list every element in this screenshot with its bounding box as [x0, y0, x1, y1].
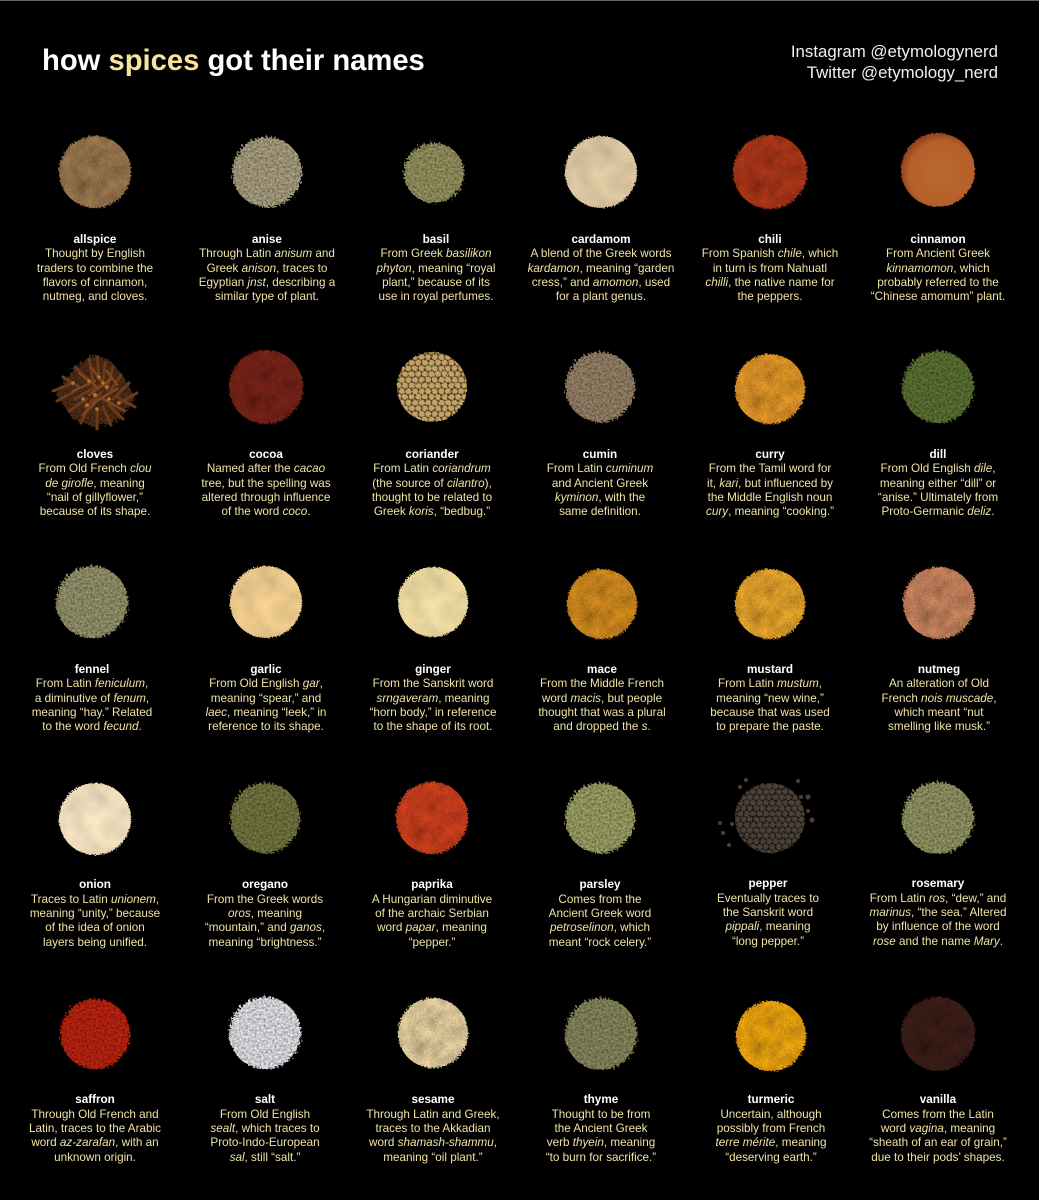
- card: nutmeg: nutmeg: [918, 663, 960, 676]
- card: allspice: allspice: [74, 233, 116, 246]
- card: cumin: same definition.: [559, 505, 641, 518]
- card: mustard: mustard: [747, 663, 793, 676]
- card: cloves: [38, 354, 152, 518]
- card: mustard: to prepare the paste.: [716, 720, 824, 733]
- card: cloves: “nail of gillyflower,”: [47, 491, 143, 504]
- card: paprika: A Hungarian diminutive: [372, 893, 492, 906]
- card: thyme: “to burn for sacrifice.”: [546, 1151, 656, 1164]
- card: cinnamon: kinnamomon, which: [886, 262, 990, 275]
- card: paprika: “pepper.”: [409, 936, 455, 949]
- card: cardamom: A blend of the Greek words: [530, 247, 671, 260]
- card: cloves: cloves: [77, 448, 113, 461]
- card: curry: [706, 353, 834, 518]
- card: basil: From Greek basilikon: [380, 247, 492, 260]
- card: pepper: “long pepper.”: [732, 935, 804, 948]
- card: turmeric: [715, 1000, 827, 1164]
- card: dill: From Old English dile,: [880, 462, 995, 475]
- card: oregano: [205, 780, 325, 949]
- card: cocoa: cocoa: [249, 448, 283, 461]
- card: cumin: [547, 350, 653, 518]
- card: garlic: reference to its shape.: [208, 720, 324, 733]
- card: cloves: de girofle, meaning: [45, 477, 145, 490]
- card: cardamom: cress,” and amomon, used: [532, 276, 670, 289]
- card: dill: dill: [930, 448, 946, 461]
- card: cardamom: kardamon, meaning “garden: [528, 262, 674, 275]
- card: saffron: [29, 997, 161, 1164]
- card: ginger: to the shape of its root.: [374, 720, 492, 733]
- card: garlic: [206, 565, 326, 733]
- card: nutmeg: smelling like musk.”: [888, 720, 990, 733]
- card: onion: layers being unified.: [43, 936, 147, 949]
- card: allspice: [37, 135, 153, 303]
- card: rosemary: rose and the name Mary.: [873, 935, 1003, 948]
- card: thyme: Thought to be from: [552, 1108, 650, 1121]
- card: rosemary: rosemary: [912, 877, 964, 890]
- card: coriander: From Latin coriandrum: [373, 462, 491, 475]
- card: anise: Egyptian jnst, describing a: [199, 276, 335, 289]
- card: vanilla: word vagina, meaning: [881, 1122, 995, 1135]
- card: turmeric: turmeric: [748, 1093, 794, 1106]
- card: mustard: meaning “new wine,”: [716, 692, 824, 705]
- card: mace: [538, 568, 666, 733]
- card: basil: plant,” because of its: [382, 276, 490, 289]
- card: sesame: word shamash-shammu,: [369, 1136, 497, 1149]
- card: ginger: “horn body,” in reference: [369, 706, 497, 719]
- card: sesame: traces to the Akkadian: [376, 1122, 490, 1135]
- card: curry: the Middle English noun: [708, 491, 832, 504]
- card: mace: From the Middle French: [540, 677, 664, 690]
- card: curry: cury, meaning “cooking.”: [706, 505, 834, 518]
- card: sesame: sesame: [412, 1093, 454, 1106]
- card: paprika: [372, 781, 492, 949]
- card: mace: thought that was a plural: [538, 706, 666, 719]
- card: saffron: Through Old French and: [31, 1108, 159, 1121]
- card: dill: “anise.” Ultimately from: [878, 491, 998, 504]
- card: cumin: From Latin cuminum: [547, 462, 653, 475]
- card: cocoa: altered through influence: [202, 491, 330, 504]
- card: thyme: thyme: [584, 1093, 618, 1106]
- card: vanilla: vanilla: [920, 1093, 956, 1106]
- card: fennel: From Latin feniculum,: [36, 677, 148, 690]
- card: anise: similar type of plant.: [215, 290, 319, 303]
- card: cocoa: Named after the cacao: [207, 462, 325, 475]
- card: pepper: [717, 778, 819, 948]
- card: fennel: a diminutive of fenum,: [35, 692, 149, 705]
- card: cumin: kyminon, with the: [555, 491, 645, 504]
- card: cardamom: cardamom: [571, 233, 631, 246]
- card: garlic: From Old English gar,: [209, 677, 323, 690]
- card: mace: and dropped the s.: [553, 720, 651, 733]
- card: mustard: [710, 568, 830, 733]
- card: oregano: oros, meaning: [228, 907, 302, 920]
- card: dill: meaning either “dill” or: [880, 477, 996, 490]
- card: turmeric: “deserving earth.”: [725, 1151, 817, 1164]
- card: parsley: Ancient Greek word: [549, 907, 651, 920]
- card: saffron: word az-zarafan, with an: [31, 1136, 159, 1149]
- social handles: Instagram @etymologynerd: [791, 42, 998, 61]
- card: turmeric: terre mérite, meaning: [715, 1136, 827, 1149]
- card: pepper: pippali, meaning: [725, 920, 811, 933]
- card: basil: use in royal perfumes.: [378, 290, 493, 303]
- card: mustard: From Latin mustum,: [718, 677, 822, 690]
- card: oregano: oregano: [242, 878, 288, 891]
- card: onion: Traces to Latin unionem,: [31, 893, 159, 906]
- card: cinnamon: From Ancient Greek: [886, 247, 990, 260]
- card: parsley: [548, 780, 651, 949]
- card: allspice: nutmeg, and cloves.: [43, 290, 147, 303]
- card: onion: onion: [79, 878, 111, 891]
- social handles: Twitter @etymology_nerd: [807, 63, 998, 82]
- card: paprika: word papar, meaning: [377, 921, 487, 934]
- card: pepper: the Sanskrit word: [723, 906, 813, 919]
- card: garlic: meaning “spear,” and: [211, 692, 321, 705]
- card: pepper: pepper: [749, 877, 787, 890]
- card: chili: the peppers.: [738, 290, 802, 303]
- card: sesame: Through Latin and Greek,: [366, 1108, 500, 1121]
- card: cloves: because of its shape.: [40, 505, 150, 518]
- card: anise: anise: [252, 233, 282, 246]
- card: allspice: flavors of cinnamon,: [43, 276, 147, 289]
- card: ginger: [369, 566, 497, 733]
- card: chili: [702, 134, 838, 303]
- card: anise: Through Latin anisum and: [199, 247, 335, 260]
- card: cocoa: [201, 350, 331, 518]
- card: basil: phyton, meaning “royal: [377, 262, 495, 275]
- card: turmeric: Uncertain, although: [720, 1108, 822, 1121]
- card: mustard: because that was used: [710, 706, 830, 719]
- card: chili: From Spanish chile, which: [702, 247, 838, 260]
- card: coriander: coriander: [405, 448, 459, 461]
- card: rosemary: marinus, “the sea.” Altered: [869, 906, 1007, 919]
- card: fennel: to the word fecund.: [42, 720, 142, 733]
- card: chili: in turn is from Nahuatl: [713, 262, 827, 275]
- card: parsley: Comes from the: [558, 893, 642, 906]
- card: ginger: From the Sanskrit word: [373, 677, 493, 690]
- card: chili: chilli, the native name for: [705, 276, 835, 289]
- card: oregano: From the Greek words: [207, 893, 323, 906]
- card: thyme: [546, 996, 656, 1164]
- card: vanilla: [869, 996, 1007, 1164]
- card: cardamom: for a plant genus.: [556, 290, 646, 303]
- card: ginger: srngaveram, meaning: [376, 692, 490, 705]
- title: how spices got their names: [42, 45, 425, 77]
- card: cinnamon: [871, 132, 1005, 303]
- card: saffron: unknown origin.: [54, 1151, 136, 1164]
- card: basil: [376, 140, 495, 303]
- card: salt: salt: [255, 1093, 275, 1106]
- card: salt: sealt, which traces to: [210, 1122, 320, 1135]
- card: rosemary: by influence of the word: [876, 920, 1000, 933]
- card: anise: [199, 134, 336, 303]
- card: parsley: parsley: [580, 878, 620, 891]
- card: cocoa: of the word coco.: [221, 505, 311, 518]
- card: allspice: traders to combine the: [37, 262, 153, 275]
- card: curry: it, kari, but influenced by: [707, 477, 833, 490]
- card: coriander: (the source of cilantro),: [372, 477, 492, 490]
- card: rosemary: From Latin ros, “dew,” and: [870, 892, 1006, 905]
- card: salt: sal, still “salt.”: [230, 1151, 300, 1164]
- card: garlic: garlic: [250, 663, 282, 676]
- card: onion: [30, 782, 160, 949]
- card: cardamom: [528, 135, 674, 303]
- card: cumin: and Ancient Greek: [552, 477, 648, 490]
- card: pepper: Eventually traces to: [717, 892, 819, 905]
- card: onion: of the idea of onion: [45, 921, 145, 934]
- card: chili: chili: [758, 233, 782, 246]
- card: fennel: [32, 564, 152, 733]
- card: anise: Greek anison, traces to: [207, 262, 327, 275]
- card: mace: mace: [587, 663, 617, 676]
- card: dill: Proto-Germanic deliz.: [881, 505, 995, 518]
- card: ginger: ginger: [415, 663, 451, 676]
- card: coriander: thought to be related to: [372, 491, 492, 504]
- card: fennel: fennel: [75, 663, 109, 676]
- card: salt: From Old English: [220, 1108, 310, 1121]
- card: curry: curry: [755, 448, 785, 461]
- card: sesame: meaning “oil plant.”: [383, 1151, 483, 1164]
- card: cumin: cumin: [583, 448, 617, 461]
- card: nutmeg: [882, 566, 996, 733]
- card: coriander: Greek koris, “bedbug.”: [374, 505, 490, 518]
- card: coriander: [372, 351, 492, 518]
- card: cinnamon: cinnamon: [910, 233, 966, 246]
- card: onion: meaning “unity,” because: [30, 907, 160, 920]
- card: oregano: meaning “brightness.”: [208, 936, 322, 949]
- card: cinnamon: probably referred to the: [877, 276, 999, 289]
- card: thyme: the Ancient Greek: [555, 1122, 647, 1135]
- card: paprika: paprika: [411, 878, 453, 891]
- card: nutmeg: French nois muscade,: [882, 692, 996, 705]
- card: saffron: Latin, traces to the Arabic: [29, 1122, 161, 1135]
- card: basil: basil: [423, 233, 449, 246]
- card: parsley: petroselinon, which: [550, 921, 650, 934]
- card: parsley: meant “rock celery.”: [549, 936, 651, 949]
- card: paprika: of the archaic Serbian: [375, 907, 489, 920]
- card: garlic: laec, meaning “leek,” in: [206, 706, 326, 719]
- card: saffron: saffron: [75, 1093, 115, 1106]
- card: curry: From the Tamil word for: [709, 462, 831, 475]
- card: sesame: [366, 996, 500, 1164]
- social handles: [791, 42, 998, 82]
- card: oregano: “mountain,” and ganos,: [205, 921, 325, 934]
- card: vanilla: due to their pods’ shapes.: [871, 1151, 1005, 1164]
- card: vanilla: Comes from the Latin: [882, 1108, 994, 1121]
- card: fennel: meaning “hay.” Related: [32, 706, 152, 719]
- card: turmeric: possibly from French: [717, 1122, 825, 1135]
- card: salt: Proto-Indo-European: [210, 1136, 320, 1149]
- card: rosemary: [869, 780, 1007, 948]
- card: cinnamon: “Chinese amomum” plant.: [871, 290, 1005, 303]
- card: mace: word macis, but people: [542, 692, 662, 705]
- card: cocoa: tree, but the spelling was: [201, 477, 331, 490]
- card: thyme: verb thyein, meaning: [547, 1136, 655, 1149]
- card: salt: [210, 994, 320, 1164]
- card: dill: [878, 348, 998, 518]
- card: allspice: Thought by English: [45, 247, 145, 260]
- card: nutmeg: An alteration of Old: [889, 677, 989, 690]
- card: vanilla: “sheath of an ear of grain,”: [869, 1136, 1007, 1149]
- card: cloves: From Old French clou: [38, 462, 152, 475]
- card: nutmeg: which meant “nut: [894, 706, 984, 719]
